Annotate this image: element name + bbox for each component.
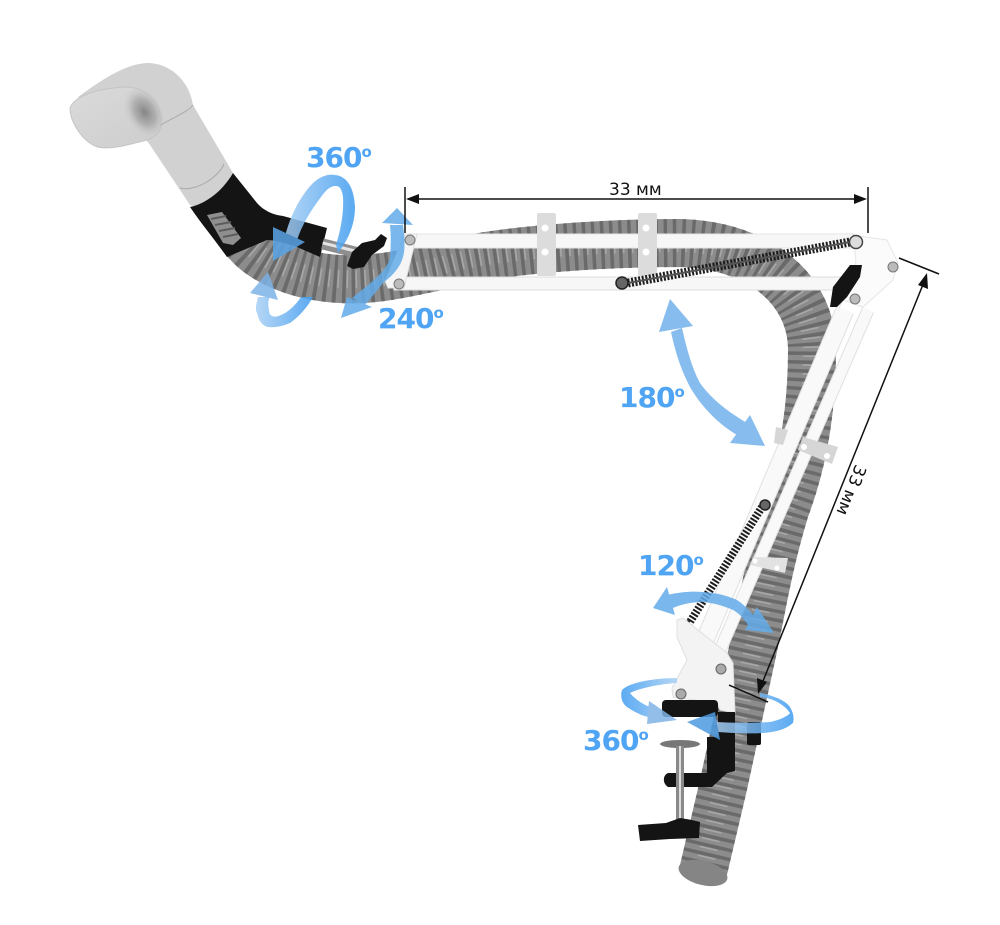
tension springs [616,242,850,630]
label: 240 degrees: o [433,304,444,322]
label: 360 degrees, joint: o [361,143,372,161]
label: 360 degrees, base: o [638,726,649,744]
label: 360 degrees, base: 360 [583,724,638,757]
upper arm clamps [537,213,657,276]
dimension: diagonal 33 mm: 33 мм [832,462,870,518]
label: 240 degrees: 240 [378,302,433,335]
lower arm frame [705,310,868,650]
corrugated hose [245,240,812,891]
elbow plate [830,235,898,310]
table clamp [638,700,761,841]
dimension: horizontal 33 mm: 33 мм [609,180,662,200]
dimension: horizontal 33 mm [405,180,868,233]
base plate [672,618,735,713]
rotation arrow: 180 degrees [659,299,765,446]
label: 120 degrees: o [693,551,704,569]
dimension: diagonal 33 mm [729,258,939,702]
label: 360 degrees, joint: 360 [306,141,361,174]
rotation arrow: 360 degrees, base [621,678,794,740]
lower arm clamps [750,427,838,573]
black swivel joint [190,173,327,257]
label: 180 degrees: o [674,383,685,401]
rotation arrow: 240 degrees [341,208,413,318]
label: 120 degrees: 120 [638,549,693,582]
rotation arrow: 360 degrees, joint [250,175,355,327]
steel shaft and T-knob [321,234,387,269]
arm bolts [394,235,415,289]
upper arm frame [385,234,854,290]
rotation arrow: 120 degrees [653,587,774,633]
suction hood [70,63,233,207]
label: 180 degrees: 180 [619,381,674,414]
